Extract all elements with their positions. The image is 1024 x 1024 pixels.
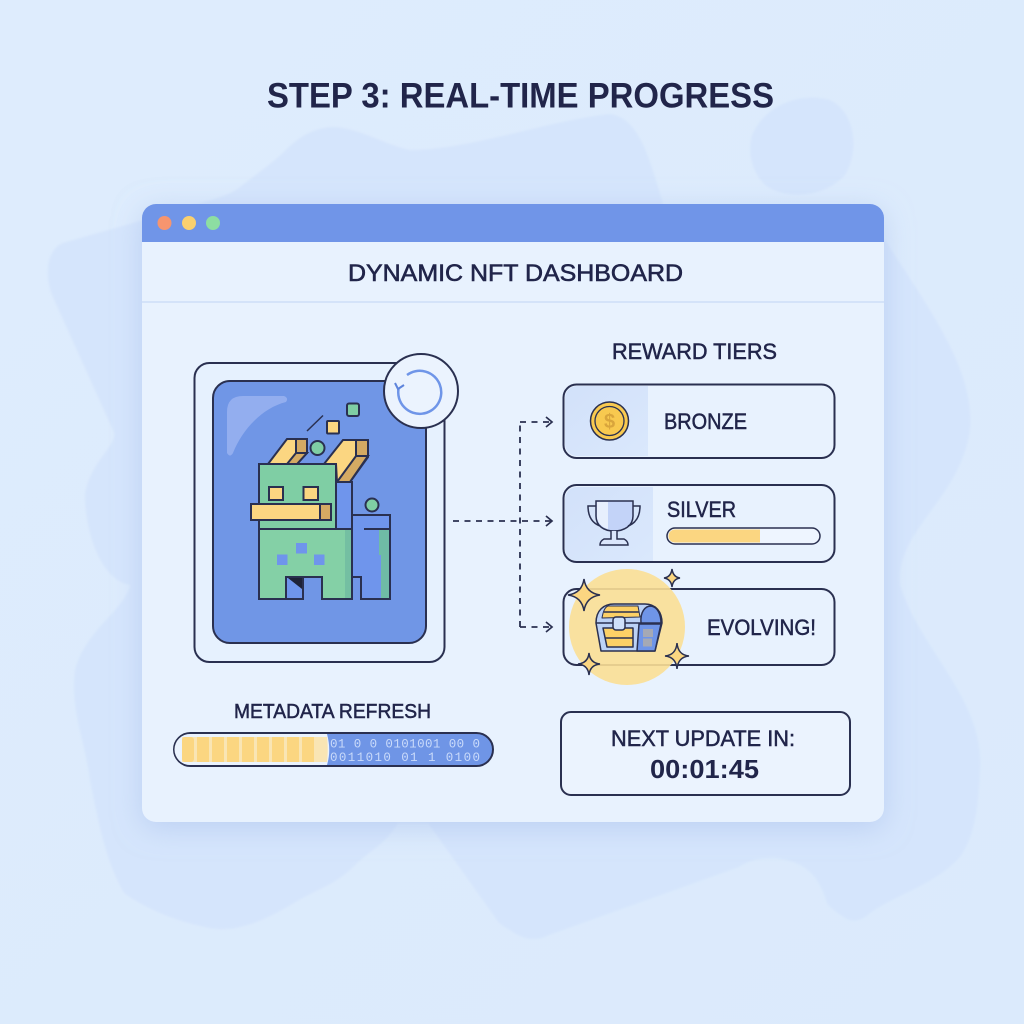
panel: bronze tier: BRONZE <box>664 409 747 434</box>
next update box: 00:01:45 <box>650 754 759 784</box>
icon: coin: $ <box>604 411 615 433</box>
panel: silver tier <box>564 485 834 562</box>
rear body <box>352 498 390 599</box>
background blobs <box>48 98 980 939</box>
icon: treasure chest <box>596 604 662 651</box>
head <box>259 464 336 529</box>
next update box: NEXT UPDATE IN: <box>611 726 795 751</box>
card glare <box>227 396 287 456</box>
icon: refresh badge <box>384 354 458 428</box>
panel: evolving tier <box>564 569 834 685</box>
sparkles <box>568 569 689 675</box>
title: STEP 3: REAL-TIME PROGRESS <box>267 76 774 116</box>
binary data: 0011010 01 1 0100 <box>330 751 480 765</box>
silver progress bar <box>667 528 820 544</box>
reward tiers heading: REWARD TIERS <box>612 339 777 364</box>
metadata refresh bar <box>174 733 493 766</box>
dashboard window <box>142 204 884 822</box>
panel: NFT card <box>194 354 458 662</box>
panel: silver tier: SILVER <box>667 497 736 522</box>
body <box>259 529 352 599</box>
binary data <box>330 738 480 765</box>
icon: trophy <box>588 501 640 545</box>
body shading <box>345 530 351 598</box>
neck <box>336 482 352 529</box>
panel: bronze tier <box>564 384 834 458</box>
body door <box>286 577 303 599</box>
metadata refresh label: METADATA REFRESH <box>234 701 431 723</box>
binary data: 01 0 0 0101001 00 0 <box>330 738 480 752</box>
icon: coin <box>590 402 628 440</box>
window title bar <box>142 204 884 242</box>
progress segments <box>182 737 328 762</box>
eyes <box>269 487 318 500</box>
card artwork background <box>213 381 426 643</box>
window control dots <box>158 216 220 230</box>
connector arrows <box>453 422 552 627</box>
highlight circle <box>569 569 685 685</box>
panel: evolving tier: EVOLVING! <box>707 615 816 640</box>
next update box <box>561 712 850 795</box>
window body <box>142 204 884 822</box>
horns <box>268 439 368 482</box>
floating pixels <box>307 404 359 455</box>
body spots <box>277 543 324 565</box>
icon: pixel creature <box>251 404 390 599</box>
card frame <box>194 363 444 662</box>
dashboard heading: DYNAMIC NFT DASHBOARD <box>348 260 683 287</box>
mouth bar <box>251 504 331 520</box>
